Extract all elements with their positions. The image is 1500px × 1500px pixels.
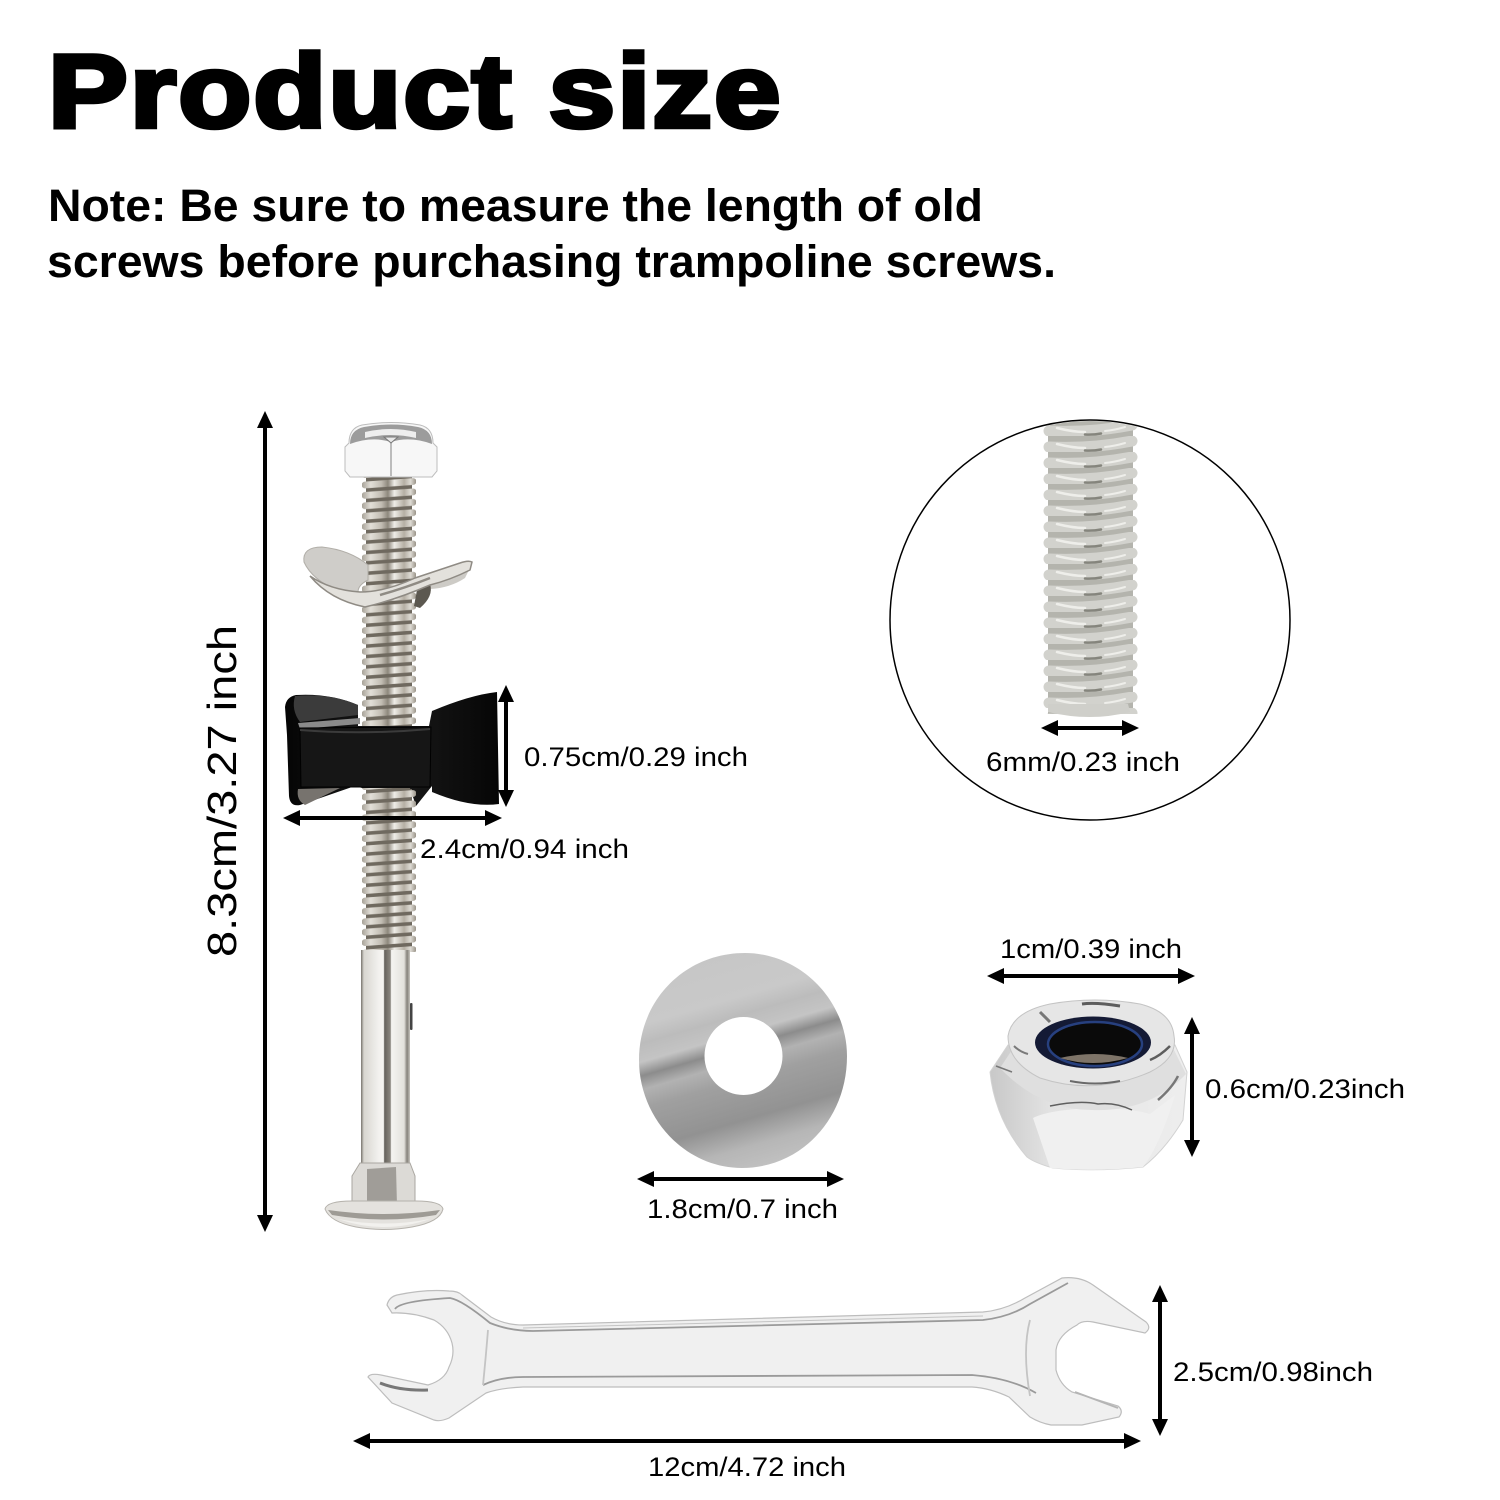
arrow: nut height xyxy=(1190,1033,1194,1141)
arrow: wrench length xyxy=(369,1439,1125,1443)
bent washer xyxy=(304,547,472,608)
label: washer diameter: 1.8cm/0.7 inch xyxy=(647,1194,838,1224)
label: wrench length: 12cm/4.72 inch xyxy=(648,1452,846,1482)
lock nut xyxy=(990,1000,1187,1170)
top lock nut xyxy=(345,422,437,477)
bolt assembly xyxy=(285,422,499,1230)
note text xyxy=(47,180,1056,287)
arrow: thread diameter xyxy=(1057,726,1123,730)
arrow: washer diameter xyxy=(653,1177,828,1181)
label: clip width: 2.4cm/0.94 inch xyxy=(420,834,629,864)
note text: screws before purchasing trampoline screws. xyxy=(47,236,1056,287)
collar xyxy=(1008,1000,1174,1086)
arrow: clip height xyxy=(504,701,508,791)
nylon insert hole xyxy=(1035,1016,1151,1068)
thread detail circle xyxy=(890,418,1290,820)
chamfer xyxy=(1000,1050,1186,1110)
flat washer xyxy=(639,953,847,1168)
label: nut height: 0.6cm/0.23inch xyxy=(1205,1074,1405,1104)
black plastic clip xyxy=(285,692,499,806)
thread below clip xyxy=(362,789,416,807)
wrench xyxy=(368,1278,1149,1425)
shank side pin xyxy=(410,1003,412,1030)
label: clip height: 0.75cm/0.29 inch xyxy=(524,742,748,772)
title: Product size xyxy=(48,33,781,149)
arrow: nut width xyxy=(1003,974,1179,978)
label: nut width: 1cm/0.39 inch xyxy=(1000,934,1182,964)
front face xyxy=(1033,1095,1175,1170)
note text: Note: Be sure to measure the length of old xyxy=(48,180,983,231)
threaded rod xyxy=(362,476,416,952)
label: wrench height: 2.5cm/0.98inch xyxy=(1173,1357,1373,1387)
arrow: total length xyxy=(263,427,267,1216)
hex body xyxy=(990,1045,1187,1170)
label: thread diameter: 6mm/0.23 inch xyxy=(986,747,1180,777)
arrow: wrench height xyxy=(1158,1301,1162,1420)
label: total length: 8.3cm/3.27 inch xyxy=(199,625,245,957)
arrow: clip width xyxy=(299,816,486,820)
magnified thread xyxy=(1043,418,1138,717)
carriage head xyxy=(325,1163,443,1230)
wrench ridges xyxy=(380,1283,1118,1408)
smooth shank xyxy=(361,950,410,1164)
